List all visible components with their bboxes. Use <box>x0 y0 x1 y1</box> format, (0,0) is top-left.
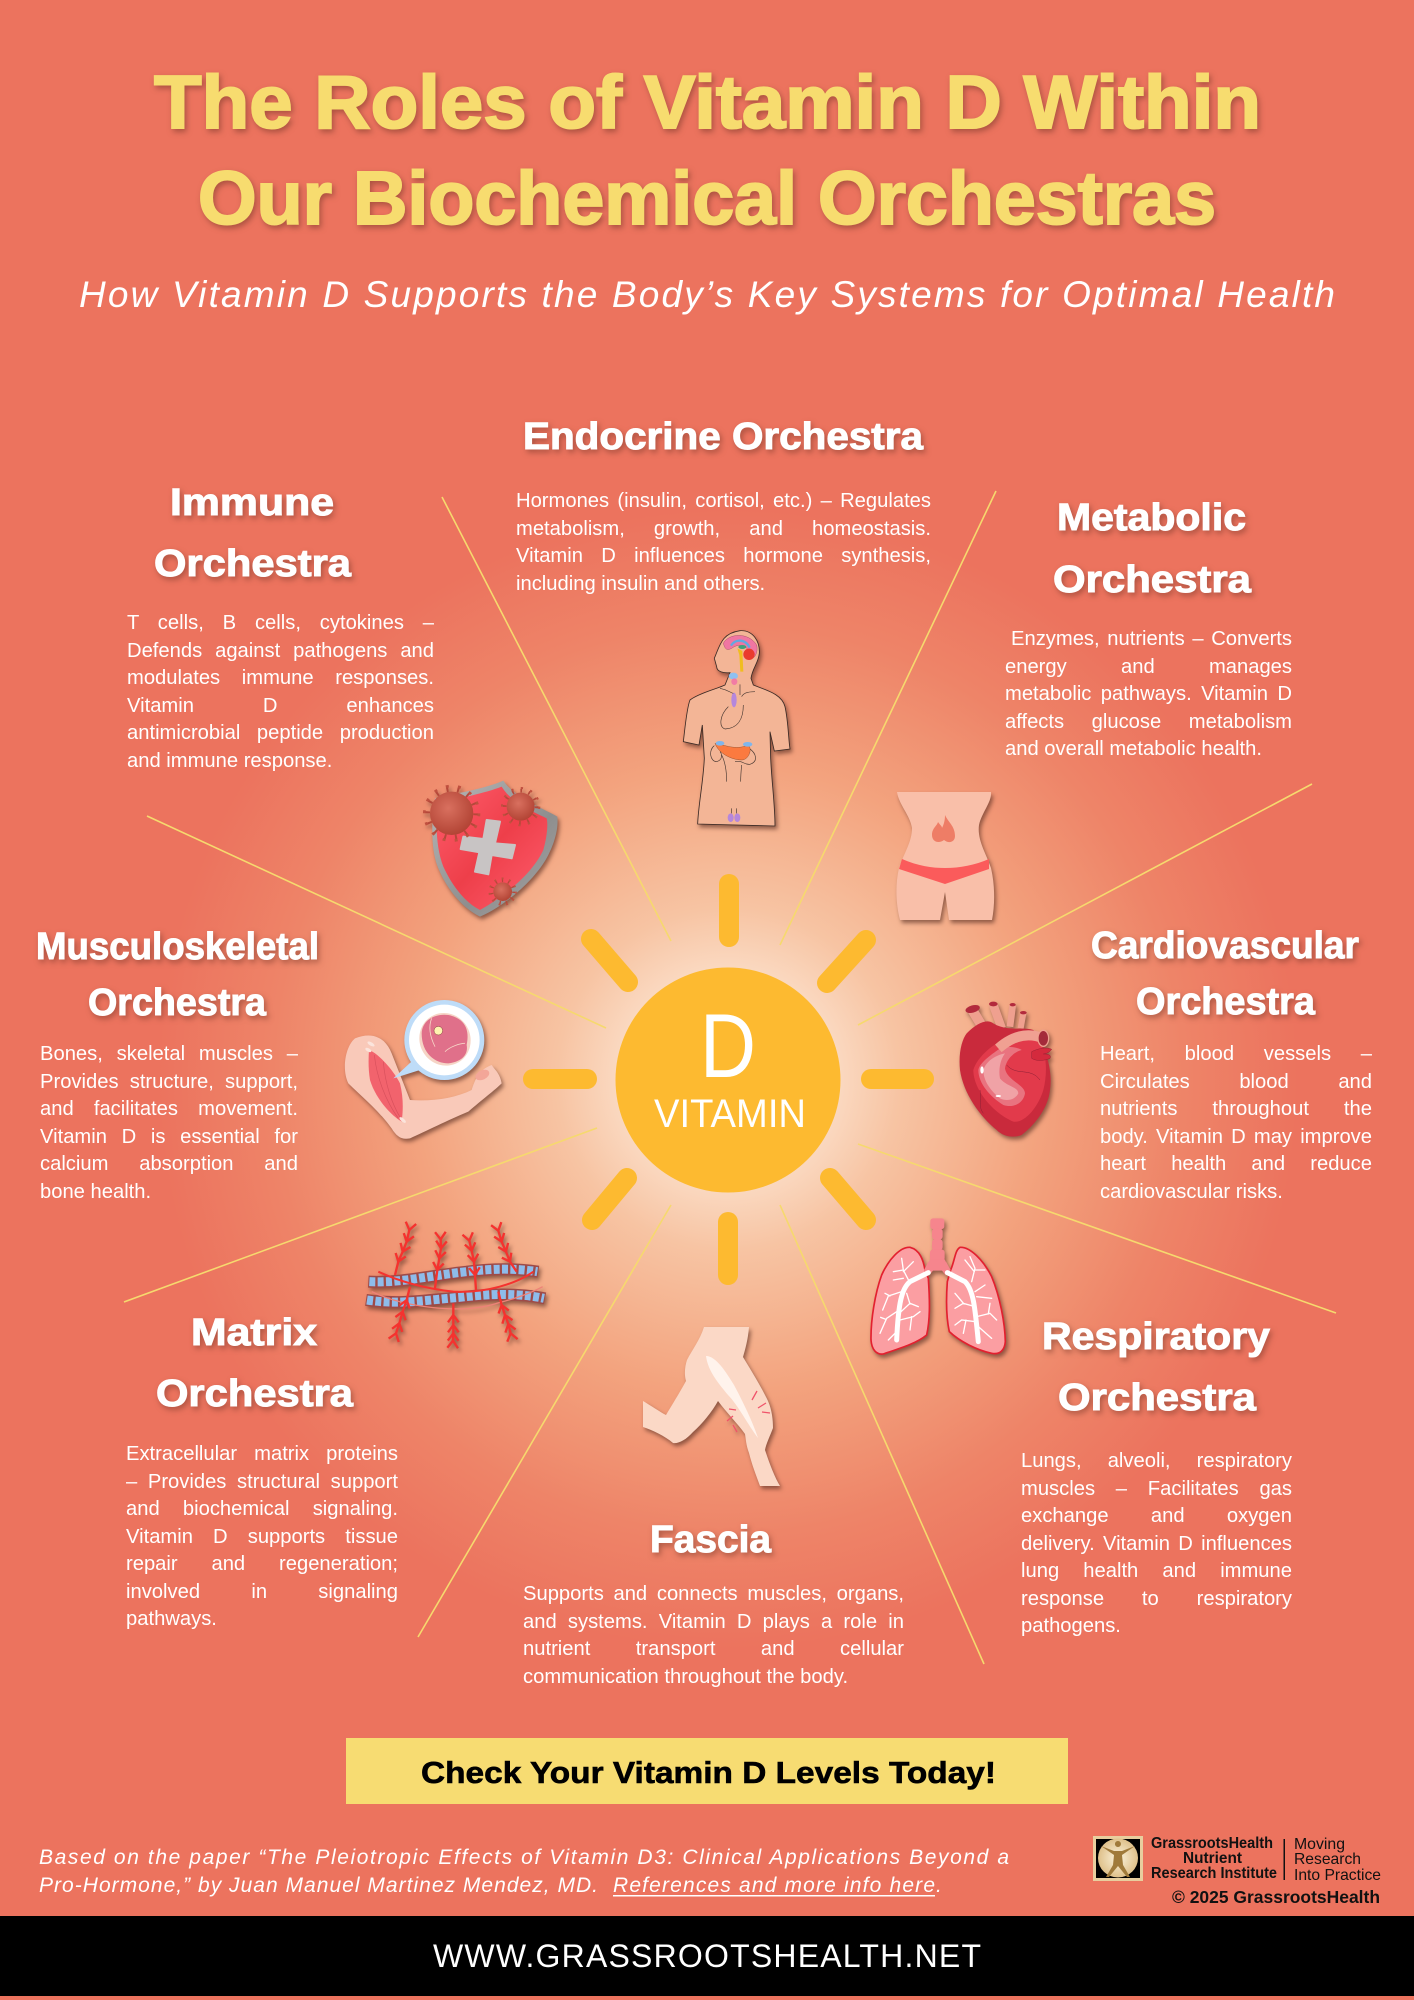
sun disc <box>616 968 840 1192</box>
logo tagline: Moving <box>1294 1836 1345 1853</box>
body text: energy and manages <box>1005 656 1292 678</box>
body text: including insulin and others. <box>516 572 765 594</box>
logo tagline: Research <box>1294 1851 1361 1868</box>
body text: heart health and reduce <box>1100 1153 1372 1175</box>
sun rays <box>533 884 924 1275</box>
body text: Supports and connects muscles, organs, <box>523 1583 904 1605</box>
body text: Defends against pathogens and <box>127 640 434 662</box>
logo name: GrassrootsHealth <box>1151 1835 1273 1852</box>
source citation: Based on the paper “The Pleiotropic Effects of Vitamin D3: Clinical Applications Beyond a <box>39 1846 1009 1869</box>
heading <box>1091 925 1359 1023</box>
body text: cardiovascular risks. <box>1100 1180 1283 1202</box>
body text: metabolic pathways. Vitamin D <box>1005 683 1292 705</box>
logo name: Research Institute <box>1151 1865 1277 1882</box>
body text: bone health. <box>40 1180 151 1202</box>
body text: involved in signaling <box>126 1580 398 1602</box>
heading <box>156 1312 354 1415</box>
icon: lungs <box>871 1218 1005 1354</box>
logo name <box>1151 1835 1277 1882</box>
body text: nutrient transport and cellular <box>523 1638 904 1660</box>
body text <box>523 1581 904 1696</box>
body text: and overall metabolic health. <box>1005 738 1262 760</box>
body text: Bones, skeletal muscles – <box>40 1043 298 1065</box>
panel: cardiovascular orchestra <box>1091 925 1372 1211</box>
title <box>154 60 1261 240</box>
body text: T cells, B cells, cytokines – <box>127 612 434 634</box>
panel: matrix orchestra <box>126 1312 398 1639</box>
body text: modulates immune responses. <box>127 667 434 689</box>
body text: exchange and oxygen <box>1021 1505 1292 1527</box>
body text: metabolism, growth, and homeostasis. <box>516 518 931 540</box>
heading: Orchestra <box>1136 981 1316 1023</box>
icon: flexed arm with muscle cross-section <box>345 1000 502 1139</box>
body text: – Provides structural support <box>126 1470 398 1492</box>
body text: Lungs, alveoli, respiratory <box>1021 1450 1292 1472</box>
heading: Respiratory <box>1042 1316 1270 1358</box>
radiating divider lines <box>124 491 1336 1664</box>
heading: Immune <box>170 482 334 524</box>
source citation: . <box>936 1874 942 1897</box>
body text: and biochemical signaling. <box>126 1498 398 1520</box>
source citation <box>39 1846 1009 1897</box>
body text: Vitamin D supports tissue <box>126 1526 398 1548</box>
body text: Enzymes, nutrients – Converts <box>1011 628 1292 650</box>
heading: Matrix <box>191 1312 317 1354</box>
body text: and facilitates movement. <box>40 1098 298 1120</box>
body text: pathways. <box>126 1608 217 1630</box>
heading <box>1042 1316 1270 1419</box>
source citation: References and more info here <box>613 1874 935 1897</box>
body text: affects glucose metabolism <box>1005 710 1292 732</box>
body text: and immune response. <box>127 750 332 772</box>
body text: Circulates blood and <box>1100 1070 1372 1092</box>
title: The Roles of Vitamin D Within <box>154 60 1261 144</box>
icon: belly with flame <box>896 792 994 920</box>
title: Our Biochemical Orchestras <box>198 156 1216 240</box>
body text <box>1100 1041 1372 1211</box>
panel: immune orchestra <box>127 482 434 780</box>
body text <box>1005 626 1292 768</box>
panel: fascia <box>523 1519 904 1696</box>
body text: delivery. Vitamin D influences <box>1021 1532 1292 1554</box>
logo name: Nutrient <box>1183 1850 1242 1867</box>
body text: Hormones (insulin, cortisol, etc.) – Regulates <box>516 490 931 512</box>
heading: Orchestra <box>1058 1377 1257 1419</box>
body text: Extracellular matrix proteins <box>126 1443 398 1465</box>
heading: Orchestra <box>88 982 267 1024</box>
body text: response to respiratory <box>1021 1588 1292 1610</box>
banner background <box>346 1738 1068 1804</box>
website url: WWW.GRASSROOTSHEALTH.NET <box>433 1938 981 1974</box>
heading <box>36 926 319 1024</box>
body text <box>126 1441 398 1639</box>
radial glow behind sun <box>0 420 1414 1720</box>
body text: antimicrobial peptide production <box>127 722 434 744</box>
icon: shield with viruses <box>424 781 558 917</box>
subtitle: How Vitamin D Supports the Body’s Key Systems for Optimal Health <box>79 274 1335 315</box>
heading: Cardiovascular <box>1091 925 1359 967</box>
heading: Endocrine Orchestra <box>523 416 924 458</box>
panel: metabolic orchestra <box>1005 497 1292 768</box>
heading <box>154 482 352 585</box>
body text: Vitamin D is essential for <box>40 1126 298 1148</box>
body text: nutrients throughout the <box>1100 1098 1372 1120</box>
body text <box>516 488 931 603</box>
heading: Musculoskeletal <box>36 926 319 968</box>
icon: human body with endocrine glands <box>683 631 790 826</box>
logo divider <box>1284 1839 1285 1880</box>
body text: Provides structure, support, <box>40 1070 298 1092</box>
body text <box>127 610 434 780</box>
body text: Vitamin D enhances <box>127 694 434 716</box>
icon: anatomical heart <box>960 1002 1052 1137</box>
logo: GrassrootsHealth Nutrient Research Institute <box>1093 1835 1381 1907</box>
logo tagline: Into Practice <box>1294 1867 1381 1884</box>
body text: repair and regeneration; <box>126 1553 398 1575</box>
body text: calcium absorption and <box>40 1153 298 1175</box>
body text: and systems. Vitamin D plays a role in <box>523 1610 904 1632</box>
panel: respiratory orchestra <box>1021 1316 1292 1646</box>
panel: musculoskeletal orchestra <box>36 926 319 1211</box>
body text: body. Vitamin D may improve <box>1100 1126 1372 1148</box>
body text <box>1021 1448 1292 1646</box>
heading: Orchestra <box>154 543 352 585</box>
heading: Orchestra <box>1053 559 1252 601</box>
body text: lung health and immune <box>1021 1560 1292 1582</box>
panel: endocrine orchestra <box>516 416 931 603</box>
sun letter D: D <box>700 996 756 1097</box>
body text: communication throughout the body. <box>523 1666 848 1688</box>
heading: Metabolic <box>1057 497 1246 539</box>
body text <box>40 1041 298 1211</box>
icon: extracellular matrix fibres <box>366 1230 545 1341</box>
body text: Heart, blood vessels – <box>1100 1043 1372 1065</box>
call to action banner <box>346 1738 1068 1804</box>
banner text: Check Your Vitamin D Levels Today! <box>421 1755 996 1790</box>
icon: leg with fascia <box>643 1327 780 1486</box>
footer bar <box>0 1916 1414 1996</box>
copyright: © 2025 GrassrootsHealth <box>1172 1887 1380 1907</box>
heading <box>1053 497 1252 601</box>
body text: pathogens. <box>1021 1615 1121 1637</box>
sun label VITAMIN: VITAMIN <box>654 1092 806 1136</box>
logo tagline <box>1294 1836 1381 1884</box>
heading: Fascia <box>650 1519 772 1561</box>
footer background <box>0 1916 1414 1996</box>
vitamin D sun <box>533 884 924 1275</box>
body text: muscles – Facilitates gas <box>1021 1478 1292 1500</box>
logo emblem <box>1093 1836 1143 1881</box>
body text: Vitamin D influences hormone synthesis, <box>516 545 931 567</box>
heading: Orchestra <box>156 1373 354 1415</box>
source citation: Pro-Hormone,” by Juan Manuel Martinez Mendez, MD. <box>39 1874 598 1897</box>
